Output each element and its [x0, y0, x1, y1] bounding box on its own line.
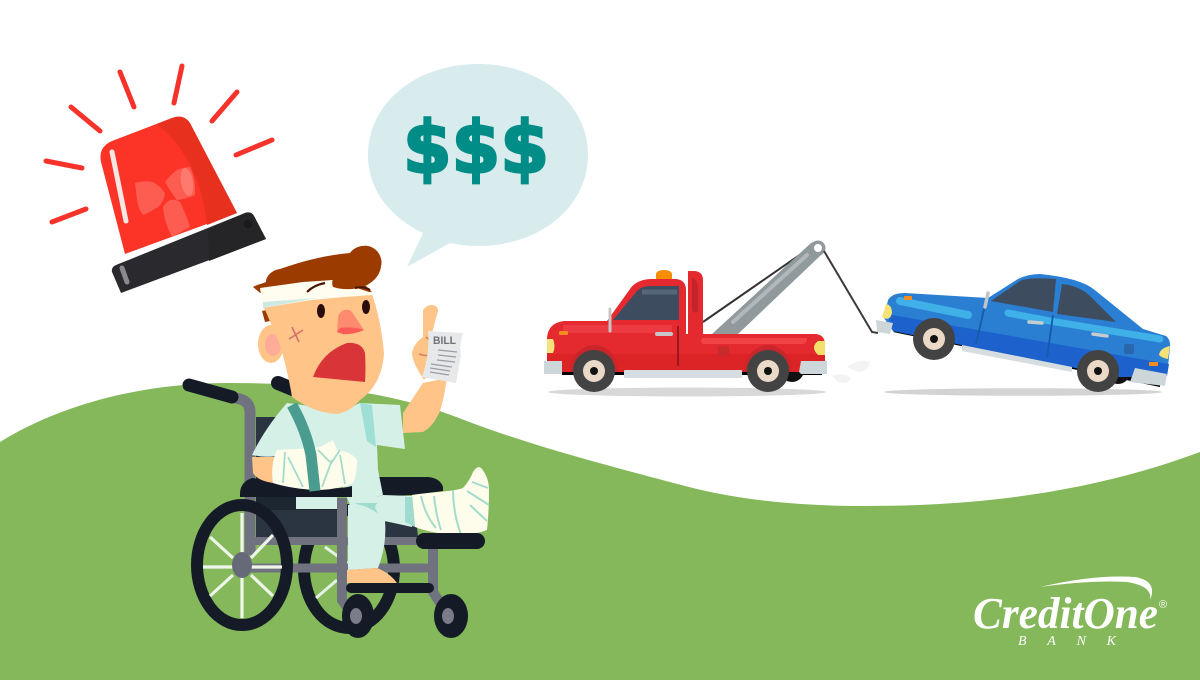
door lines [976, 305, 1053, 358]
back spokes [316, 547, 350, 598]
door handles [1029, 322, 1107, 336]
gown torso [252, 403, 405, 505]
rear wheel [304, 510, 394, 628]
scar [289, 327, 303, 342]
right caster [434, 594, 468, 638]
nose [337, 310, 364, 334]
siren dome [100, 117, 237, 254]
gown leg [348, 495, 412, 570]
bandage [260, 280, 372, 308]
truck window [613, 286, 679, 320]
cast arm [252, 440, 357, 490]
truck wheel arches [570, 345, 618, 372]
car windows [991, 278, 1056, 312]
rear axle [780, 358, 804, 382]
truck shadow [548, 388, 826, 396]
door handle [657, 332, 671, 336]
cast leg [405, 467, 489, 535]
hair fringe [332, 250, 381, 289]
head [253, 246, 384, 414]
left caster [342, 594, 374, 638]
ear [258, 325, 284, 363]
car shadow [884, 388, 1162, 396]
neck and face [263, 294, 384, 414]
far handle [278, 383, 300, 392]
bumpers [544, 361, 562, 374]
eyes [317, 304, 325, 318]
raised arm and hand [403, 305, 447, 433]
tow hook cable [824, 251, 878, 333]
car lower band [887, 314, 1169, 377]
blue car [876, 274, 1170, 396]
car front wheel [913, 318, 955, 360]
logo wordmark: CreditOne [973, 589, 1158, 638]
logo: Credit One Bank [973, 576, 1167, 649]
headlights [547, 339, 554, 353]
dust puffs [832, 361, 870, 383]
mirror [608, 309, 612, 331]
bubble shape [368, 64, 588, 267]
mouth [313, 343, 366, 382]
turn signal [559, 331, 568, 335]
lower body band [547, 354, 825, 372]
left armrest [240, 478, 352, 497]
door line [677, 326, 679, 366]
sling strap [292, 405, 315, 491]
foot rest [351, 583, 429, 593]
truck front wheel [573, 350, 615, 392]
undercarriage [562, 372, 822, 375]
logo subtitle: BANK [1018, 634, 1117, 649]
upper highlight [563, 325, 672, 333]
dollar signs: $$$ [403, 106, 549, 190]
side skirt [962, 345, 1072, 372]
icon: red siren [46, 66, 272, 293]
headlights [882, 304, 892, 319]
signals [904, 296, 912, 300]
wheelchair and patient [189, 246, 489, 638]
truck body [547, 271, 825, 372]
push handle [189, 385, 232, 397]
registered mark: ® [1159, 599, 1167, 611]
green hill background [0, 383, 1200, 680]
bill: BILL [433, 335, 456, 347]
siren base [112, 212, 266, 293]
amber light [656, 270, 672, 279]
logo swoosh [1040, 576, 1152, 600]
seat back [256, 417, 337, 537]
bumpers [876, 320, 893, 334]
boom arm [712, 241, 825, 334]
bare foot [347, 568, 397, 583]
fuel cap [1124, 344, 1134, 354]
car rear wheel [1077, 350, 1119, 392]
boom cable [703, 245, 814, 322]
big wheel [197, 505, 287, 625]
hair back [253, 246, 381, 296]
cab post slot [692, 278, 698, 312]
side step [624, 370, 742, 378]
car mirror [985, 293, 988, 307]
car highlights [900, 301, 968, 315]
eyebrows [307, 283, 370, 292]
car underside [893, 328, 1160, 387]
pulley [810, 240, 826, 256]
siren rays [46, 66, 272, 222]
bill [422, 331, 463, 383]
leg rest [424, 533, 477, 549]
speech bubble [368, 64, 588, 267]
chair frame [190, 386, 446, 615]
car body [884, 274, 1170, 377]
fuel cap [718, 346, 729, 356]
footrest back panel [383, 521, 418, 537]
tow truck [544, 240, 878, 396]
truck rear wheel [747, 350, 789, 392]
right armrest [377, 477, 443, 497]
gown seat patch [296, 497, 337, 509]
